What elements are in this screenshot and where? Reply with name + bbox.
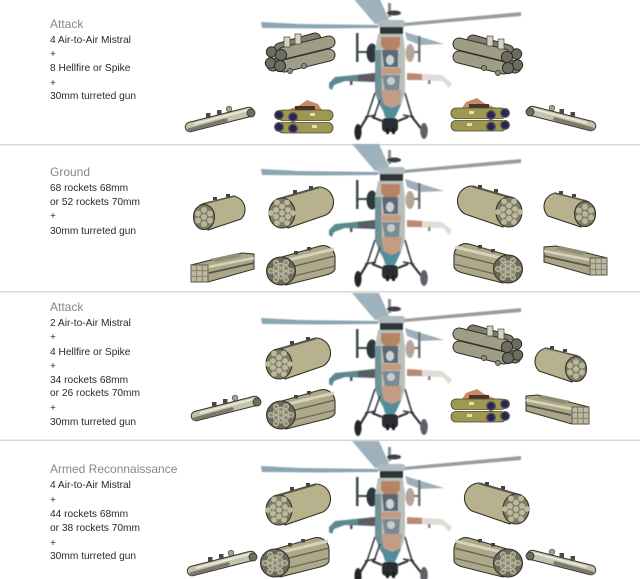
text: armed reconnaissance loadout: + (50, 495, 56, 506)
weapon: right gray missile pack (459, 36, 523, 76)
weapon: left yellow missile pack (275, 100, 333, 133)
text: attack loadout two: 34 rockets 68mm (50, 375, 128, 386)
weapon: left multi tube pod (260, 538, 329, 577)
text: attack loadout two: Attack (50, 300, 84, 314)
weapon: left mistral launcher (191, 550, 257, 574)
text: attack loadout two: 30mm turreted gun (50, 417, 136, 428)
text: armed reconnaissance loadout: Armed Reconnaissance (50, 462, 178, 476)
text: attack loadout two: + (50, 332, 56, 343)
text: armed reconnaissance loadout: + (50, 538, 56, 549)
text: ground loadout (50, 165, 140, 237)
text: armed reconnaissance loadout: 44 rockets 68mm (50, 509, 128, 520)
text: armed reconnaissance loadout: or 38 rockets 70mm (50, 523, 140, 534)
text: attack loadout one (50, 17, 136, 102)
weapon: right multi tube pod (454, 538, 522, 577)
weapon: left large rocket pod (265, 337, 331, 379)
helicopter (261, 293, 521, 436)
weapon: right gray missile pack (459, 326, 523, 366)
weapon: right mistral launcher (526, 549, 592, 573)
weapon: right square pod (526, 395, 589, 424)
weapon: left gray missile pack (265, 34, 329, 74)
helicopter (261, 0, 521, 140)
weapon: right large rocket pod (464, 482, 530, 524)
weapon: right mistral launcher (526, 105, 592, 129)
panel: ground configuration (50, 144, 607, 287)
weapon: right yellow missile pack (451, 389, 509, 422)
text: attack loadout one: 30mm turreted gun (50, 91, 136, 102)
text: armed reconnaissance loadout: 30mm turreted gun (50, 551, 136, 562)
weapon: left square pod (191, 253, 254, 282)
weapon: left large rocket pod (265, 483, 331, 525)
panel: armed reconnaissance configuration (50, 441, 592, 579)
divider lines (0, 144, 640, 441)
text: attack loadout one: Attack (50, 17, 84, 31)
panel: attack configuration two (50, 293, 589, 436)
helicopter (261, 441, 521, 579)
text: attack loadout two: 2 Air-to-Air Mistral (50, 318, 131, 329)
text: ground loadout: 68 rockets 68mm (50, 183, 128, 194)
text: ground loadout: + (50, 211, 56, 222)
text: armed reconnaissance loadout (50, 462, 178, 562)
text: attack loadout two: + (50, 361, 56, 372)
text: attack loadout two: + (50, 403, 56, 414)
text: attack loadout two: 4 Hellfire or Spike (50, 347, 131, 358)
weapon: right small rocket pod (544, 191, 596, 227)
weapon: right square pod (544, 246, 607, 275)
text: ground loadout: 30mm turreted gun (50, 226, 136, 237)
weapon: left mistral launcher (195, 395, 261, 419)
text: attack loadout one: 4 Air-to-Air Mistral (50, 35, 131, 46)
weapon: left large rocket pod (268, 186, 334, 228)
weapon: right small rocket pod (535, 346, 586, 382)
text: attack loadout two: or 26 rockets 70mm (50, 388, 140, 399)
weapon: left multi tube pod (266, 390, 335, 429)
panel: attack configuration one (50, 0, 592, 140)
weapon: left mistral launcher (189, 106, 255, 130)
text: ground loadout: or 52 rockets 70mm (50, 197, 140, 208)
text: ground loadout: Ground (50, 165, 90, 179)
weapon: right multi tube pod (454, 244, 522, 283)
text: attack loadout one: 8 Hellfire or Spike (50, 63, 131, 74)
text: attack loadout two (50, 300, 140, 428)
helicopter (261, 144, 521, 287)
weapon: left small rocket pod (194, 194, 245, 230)
weapon: left multi tube pod (266, 246, 335, 285)
text: attack loadout one: + (50, 78, 56, 89)
weapon: right yellow missile pack (451, 98, 509, 131)
weapon: right large rocket pod (457, 185, 523, 227)
text: attack loadout one: + (50, 49, 56, 60)
text: armed reconnaissance loadout: 4 Air-to-Air Mistral (50, 480, 131, 491)
